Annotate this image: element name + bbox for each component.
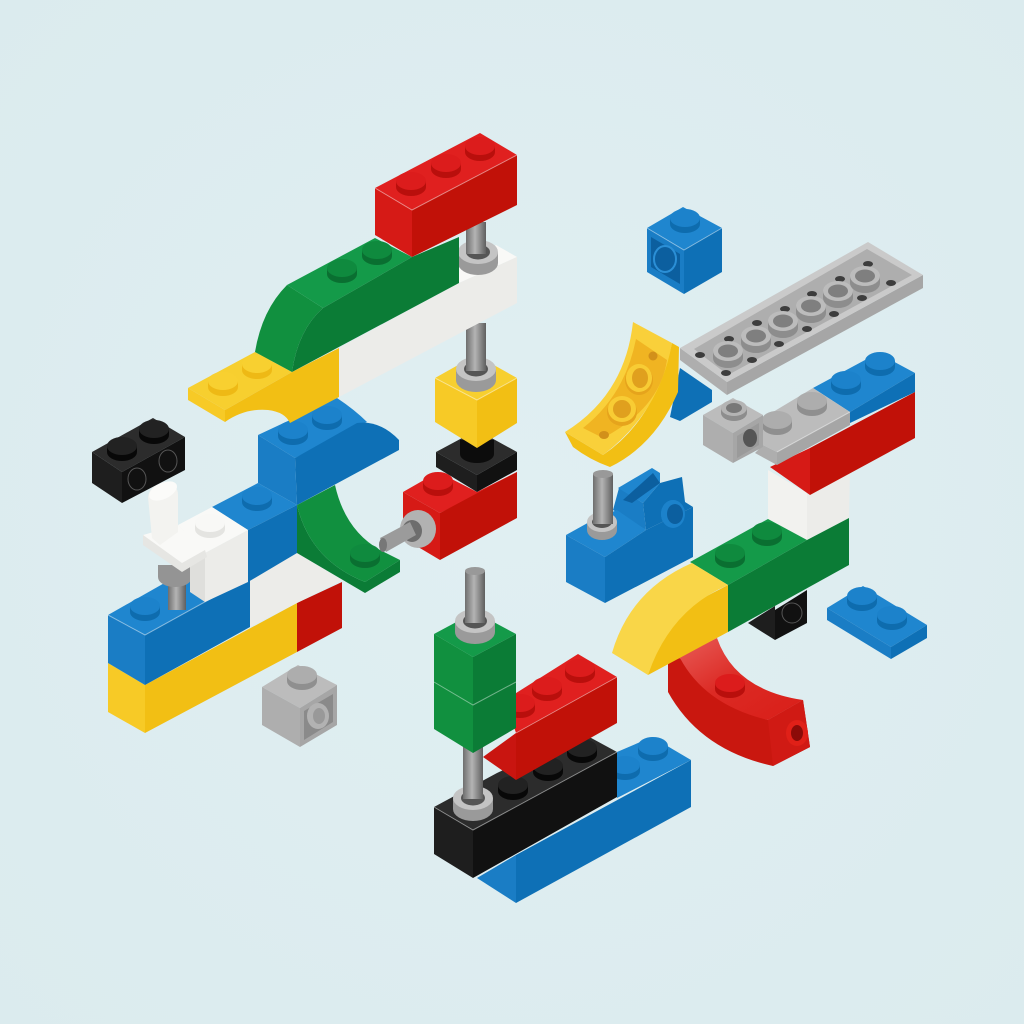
lip and side <box>565 343 679 467</box>
central lower: red brick <box>483 654 617 780</box>
left stack: blue lower brick <box>108 560 250 685</box>
black brick beneath green <box>748 590 807 640</box>
grey perforated plate <box>680 242 923 395</box>
blue cube, top right <box>647 207 722 294</box>
rod and collar <box>158 565 192 610</box>
blue plate, right <box>827 586 927 659</box>
top assembly: green sloped brick <box>255 237 459 372</box>
red brick of right stack <box>770 392 915 495</box>
upright block <box>613 468 693 530</box>
grey plate of right stack <box>755 388 850 465</box>
top assembly: white long brick <box>339 245 517 397</box>
red curved arch <box>668 638 810 766</box>
left stack: yellow long brick <box>108 603 297 733</box>
central lower: rod and collar <box>453 745 493 821</box>
black 2x1 brick <box>92 418 185 503</box>
red brick with black cap and side pin <box>379 430 517 560</box>
blue bracket brick with pin <box>566 468 693 603</box>
black cap <box>436 430 517 492</box>
left stack: white mid brick <box>250 553 342 627</box>
central lower: blue long brick <box>477 737 691 903</box>
blue sloped brick <box>258 398 399 505</box>
base block <box>566 510 646 557</box>
top assembly: rod and collar <box>458 222 498 275</box>
left stack: upper blue brick <box>212 483 297 582</box>
grey technic brick with side hole <box>703 398 763 463</box>
small plate holes <box>695 261 896 376</box>
top assembly: red 3-stud brick <box>375 133 517 257</box>
right stack: blue brick on red <box>813 352 915 423</box>
yellow curved slope <box>612 563 728 675</box>
studs inside the recess <box>607 364 653 426</box>
vertical pin <box>148 483 178 545</box>
upper surface <box>565 322 672 455</box>
white clip brick with pin and rod <box>143 477 248 610</box>
recess <box>583 339 667 438</box>
green brick of right stack <box>690 518 849 632</box>
green curved arch <box>297 485 400 593</box>
central lower: green double cube with pin <box>434 567 516 753</box>
central lower: black long brick <box>434 733 617 878</box>
pin <box>587 522 617 540</box>
top assembly: yellow base piece <box>188 348 339 423</box>
small blue brick behind the grey plate <box>670 368 712 421</box>
left stack: red end <box>297 582 342 652</box>
block <box>190 553 205 602</box>
white block of right stack <box>768 470 850 540</box>
grey cube with socket <box>262 665 337 747</box>
side pin <box>379 510 436 552</box>
yellow curved arch piece <box>565 322 679 467</box>
arm <box>143 525 205 570</box>
yellow cube with rod <box>435 323 517 448</box>
